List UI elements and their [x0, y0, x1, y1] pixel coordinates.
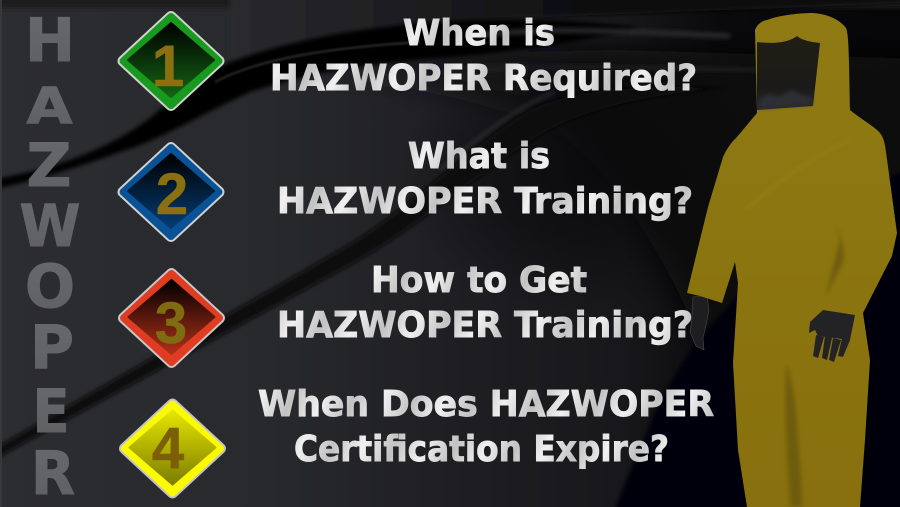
right glove [809, 310, 855, 362]
arm shadow [825, 225, 844, 298]
question 3 [277, 260, 693, 346]
badge 3: red diamond [124, 274, 220, 362]
vertical word HAZWOPER: R [31, 439, 75, 507]
question 3: HAZWOPER Training? [277, 305, 693, 346]
question 1: HAZWOPER Required? [270, 58, 697, 99]
question 3: How to Get [371, 260, 587, 301]
badge 2: blue diamond [123, 148, 219, 236]
suit fold [745, 140, 850, 210]
question 4 [258, 384, 714, 470]
vertical word HAZWOPER: Z [26, 131, 72, 201]
badge 3: red diamond: 3 [155, 291, 187, 356]
vertical word HAZWOPER: W [20, 192, 80, 260]
vertical word HAZWOPER: O [25, 252, 75, 322]
question 2: HAZWOPER Training? [277, 181, 693, 222]
vertical word HAZWOPER: H [25, 6, 75, 76]
question 4: Certification Expire? [294, 429, 669, 470]
badge 1: green diamond: 1 [152, 34, 184, 99]
figure: yellow hazmat suit [687, 13, 897, 507]
badge 2: blue diamond: 2 [156, 162, 188, 227]
left glove [690, 296, 709, 350]
vertical word HAZWOPER: A [26, 77, 73, 135]
question 1: When is [403, 13, 555, 54]
question 2: What is [408, 136, 550, 177]
leg shading [785, 363, 802, 507]
badge 4: yellow diamond: 4 [152, 416, 184, 481]
visor reflections [760, 90, 812, 108]
vertical word HAZWOPER: P [30, 313, 74, 383]
visor [757, 36, 820, 110]
vertical word HAZWOPER [20, 6, 80, 507]
suit body [687, 13, 897, 507]
question 4: When Does HAZWOPER [258, 384, 714, 425]
question 2 [277, 136, 693, 222]
vertical word HAZWOPER: E [32, 377, 70, 447]
badge 4: yellow diamond [124, 404, 220, 493]
badge 1: green diamond [123, 16, 219, 106]
question 1 [270, 13, 697, 99]
